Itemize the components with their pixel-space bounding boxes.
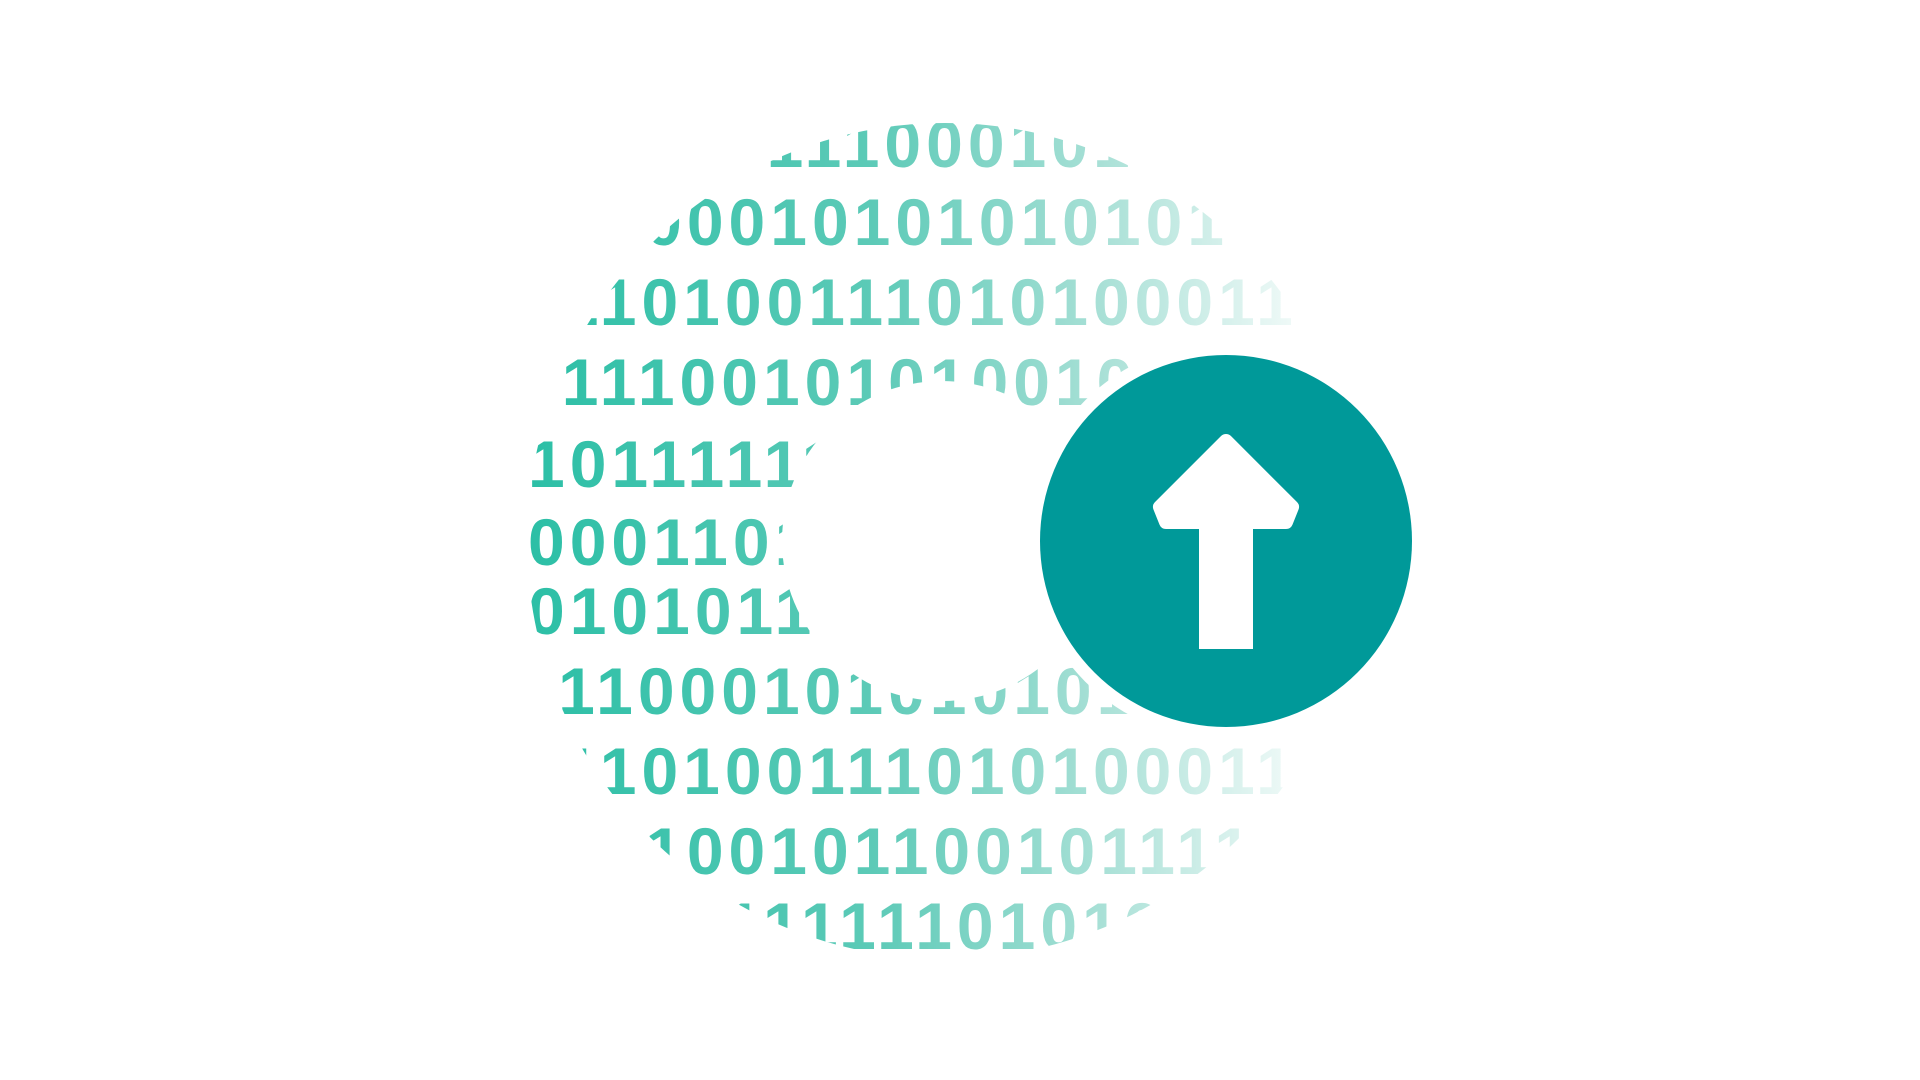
binary digit ring: 0001101011100101101 bbox=[528, 505, 1306, 579]
binary digit ring: 1110001010101010110 bbox=[520, 654, 1302, 728]
illustration: binary ring with upload icon bbox=[530, 123, 1412, 950]
icon: upload circle bbox=[1040, 355, 1412, 727]
icon: up arrow bbox=[1160, 441, 1292, 649]
binary digit ring: 0101001011001011110 bbox=[520, 814, 1298, 888]
binary digit ring: 0101101110001010011 bbox=[520, 107, 1298, 181]
binary digit ring bbox=[520, 107, 1312, 963]
binary digit ring: 0110100111010100011 bbox=[520, 265, 1298, 339]
binary digit ring: 0111001010100101011 bbox=[520, 345, 1302, 419]
binary digit ring: 0100111111101010110 bbox=[520, 889, 1287, 963]
binary digit ring: 0110100111010100011 bbox=[520, 734, 1298, 808]
binary digit ring: 1010001010101010100 bbox=[520, 185, 1312, 259]
binary digit ring: 1011111110100101101 bbox=[528, 427, 1295, 501]
binary digit ring: 0101011101010010110 bbox=[528, 574, 1310, 648]
